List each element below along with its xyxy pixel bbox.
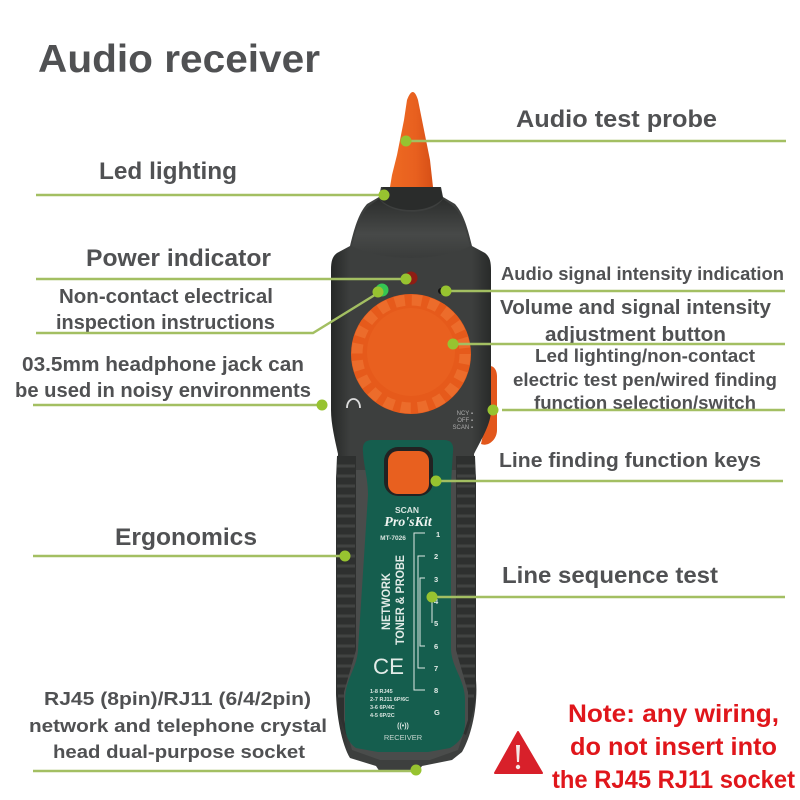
line sequence diagram: 4 xyxy=(434,597,439,606)
neck shadow xyxy=(379,187,443,210)
lower body band xyxy=(344,470,468,760)
callout: non-contact electrical inspection: inspection instructions xyxy=(56,312,275,334)
warning note: Note: any wiring, xyxy=(568,700,779,728)
warning note: do not insert into xyxy=(570,733,777,761)
callout: power indicator xyxy=(36,245,412,284)
callout: headphone jack: 03.5mm headphone jack can xyxy=(22,354,304,376)
panel labels: CE xyxy=(373,654,404,679)
line sequence diagram: 6 xyxy=(434,642,438,651)
grip ribs xyxy=(336,456,476,735)
callout: volume adjustment: Volume and signal intensity xyxy=(500,297,772,319)
callout: line sequence test: Line sequence test xyxy=(502,562,718,588)
callout: audio test probe xyxy=(400,106,786,146)
line sequence diagram: G xyxy=(434,708,440,717)
line sequence diagram: 5 xyxy=(434,619,438,628)
callout: line sequence test xyxy=(426,562,785,602)
panel labels: SCAN xyxy=(395,505,419,515)
callout: headphone jack xyxy=(15,354,328,410)
panel labels: MT-7026 xyxy=(380,535,406,542)
panel labels: 1-8 RJ45 xyxy=(370,689,393,695)
callout: led lighting: Led lighting xyxy=(99,158,237,185)
panel labels: TONER & PROBE xyxy=(395,555,407,645)
probe tip xyxy=(390,92,433,187)
panel labels: RECEIVER xyxy=(384,733,423,742)
indicator LEDs xyxy=(404,272,418,284)
line sequence diagram: 1 xyxy=(436,530,440,539)
line sequence diagram: 7 xyxy=(434,664,438,673)
warning note xyxy=(552,700,796,794)
panel labels: 2-7 RJ11 6P/6C xyxy=(370,697,409,703)
callout: function selection switch: function selection/switch xyxy=(534,393,756,413)
green panel xyxy=(345,440,465,752)
switch labels: OFF ▪ xyxy=(457,418,473,424)
line sequence diagram xyxy=(414,530,440,717)
callout: line finding keys xyxy=(430,450,783,486)
side switch xyxy=(481,366,497,445)
callout: non-contact electrical inspection xyxy=(36,286,384,334)
panel labels: Pro'sKit xyxy=(384,515,433,530)
callout: volume adjustment: adjustment button xyxy=(545,324,726,346)
dial xyxy=(351,294,471,414)
callout: audio signal intensity xyxy=(440,264,785,296)
switch labels xyxy=(453,411,473,431)
device: network toner receiver xyxy=(331,92,497,772)
callout: led lighting xyxy=(36,158,390,200)
callout: function selection switch xyxy=(488,346,785,416)
callout: RJ45 RJ11 socket: head dual-purpose socket xyxy=(53,741,305,762)
switch labels: NCY ▪ xyxy=(457,411,473,417)
scan button xyxy=(384,447,433,496)
callout: RJ45 RJ11 socket: network and telephone crystal xyxy=(29,715,327,736)
panel labels: NETWORK xyxy=(381,572,393,630)
panel labels xyxy=(370,505,433,742)
panel labels: 3-6 6P/4C xyxy=(370,705,395,711)
switch labels: SCAN ▪ xyxy=(453,425,473,431)
callout: ergonomics xyxy=(33,524,350,562)
panel labels: 4-5 6P/2C xyxy=(370,713,395,719)
callout: function selection switch: Led lighting/non-contact xyxy=(535,346,755,366)
line sequence diagram: 8 xyxy=(434,686,438,695)
callout: line finding keys: Line finding function keys xyxy=(499,450,761,472)
shoulder dome xyxy=(352,199,470,258)
panel labels: ((•)) xyxy=(397,723,409,730)
body xyxy=(331,187,491,772)
callout: ergonomics: Ergonomics xyxy=(115,524,257,551)
callout: non-contact electrical inspection: Non-contact electrical xyxy=(59,286,273,308)
callout: audio test probe: Audio test probe xyxy=(516,106,717,133)
callout: volume adjustment xyxy=(448,297,785,350)
callout: function selection switch: electric test pen/wired finding xyxy=(513,370,777,390)
callout: RJ45 RJ11 socket: RJ45 (8pin)/RJ11 (6/4/2pin) xyxy=(44,688,311,709)
headphone icon xyxy=(347,399,360,408)
line sequence diagram: 3 xyxy=(434,575,438,584)
callout: RJ45 RJ11 socket xyxy=(29,688,422,776)
warning icon xyxy=(495,732,542,773)
callout: audio signal intensity: Audio signal intensity indication xyxy=(501,264,784,284)
line sequence diagram: 2 xyxy=(434,552,438,561)
callout: headphone jack: be used in noisy environments xyxy=(15,380,311,402)
callout: power indicator: Power indicator xyxy=(86,245,271,272)
title: Audio receiver xyxy=(38,38,320,81)
